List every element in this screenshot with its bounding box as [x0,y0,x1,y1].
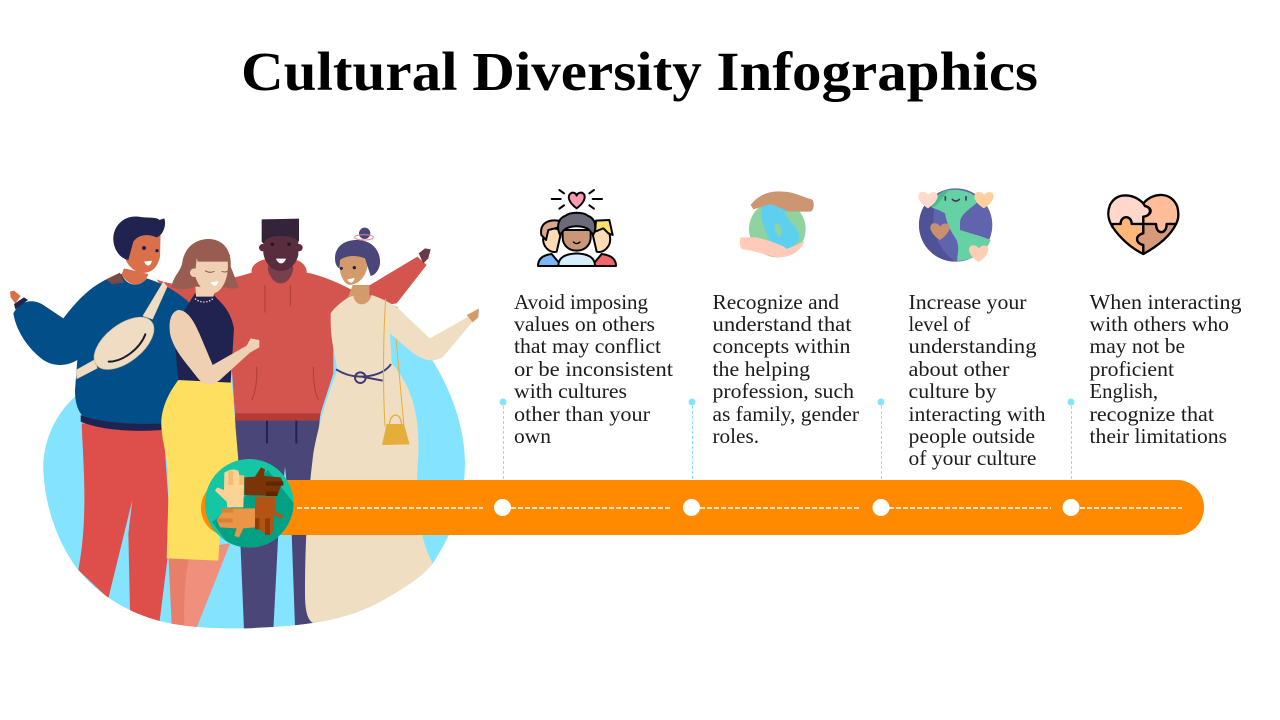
text block 2: understand that [712,312,852,336]
text block 3: about other [908,357,1010,381]
badge: joined hands [205,459,294,548]
text block 3: level of [908,312,970,336]
man in red hoodie [157,219,431,630]
text block 4 [1090,290,1242,448]
illustration: group of diverse friends [10,217,479,630]
icon: puzzle heart [1108,195,1178,254]
text block 1: own [514,424,552,448]
text block 2: profession, such [712,379,855,403]
icon: hands holding the globe [740,191,814,257]
text block 3: understanding [908,334,1037,358]
text block 1: with cultures [514,379,627,403]
text block 2: Recognize and [712,290,840,314]
timeline marker 4 [1062,398,1080,516]
text block 3: culture by [908,379,997,403]
icon: three people with a heart [538,190,616,266]
text block 2 [712,290,859,448]
text block 1: values on others [514,312,655,336]
text block 3: of your culture [908,446,1036,470]
title: Cultural Diversity Infographics [241,41,1038,102]
text block 1: or be inconsistent [514,357,673,381]
text block 4: recognize that [1090,402,1214,426]
figures [10,217,479,630]
text block 1: Avoid imposing [514,290,648,314]
icon: smiling earth with hearts [918,188,994,262]
man in blue sweater [10,217,190,623]
text block 4: When interacting [1090,290,1242,314]
timeline marker 2 [683,398,700,516]
text block 3: people outside [908,424,1035,448]
text block 3 [908,290,1046,470]
text block 1: that may conflict [514,334,661,358]
text block 2: the helping [712,357,811,381]
text block 4: proficient [1090,357,1174,381]
text block 4: their limitations [1090,424,1227,448]
text block 4: English, [1090,379,1158,403]
orange timeline bar [280,480,1204,535]
text block 2: roles. [712,424,759,448]
woman in yellow skirt [161,239,259,627]
text block 4: may not be [1090,334,1185,358]
timeline marker 3 [872,398,890,516]
blue blob background [43,333,465,628]
text block 3: Increase your [908,290,1027,314]
timeline marker 1 [494,398,511,516]
text block 3: interacting with [908,402,1046,426]
text block 4: with others who [1090,312,1229,336]
text block 1 [514,290,673,448]
text block 2: as family, gender [712,402,859,426]
timeline dashed line [297,507,1182,509]
text block 2: concepts within [712,334,851,358]
orange back of badge [201,480,257,536]
text block 1: other than your [514,402,650,426]
woman in cream dress [305,228,479,624]
